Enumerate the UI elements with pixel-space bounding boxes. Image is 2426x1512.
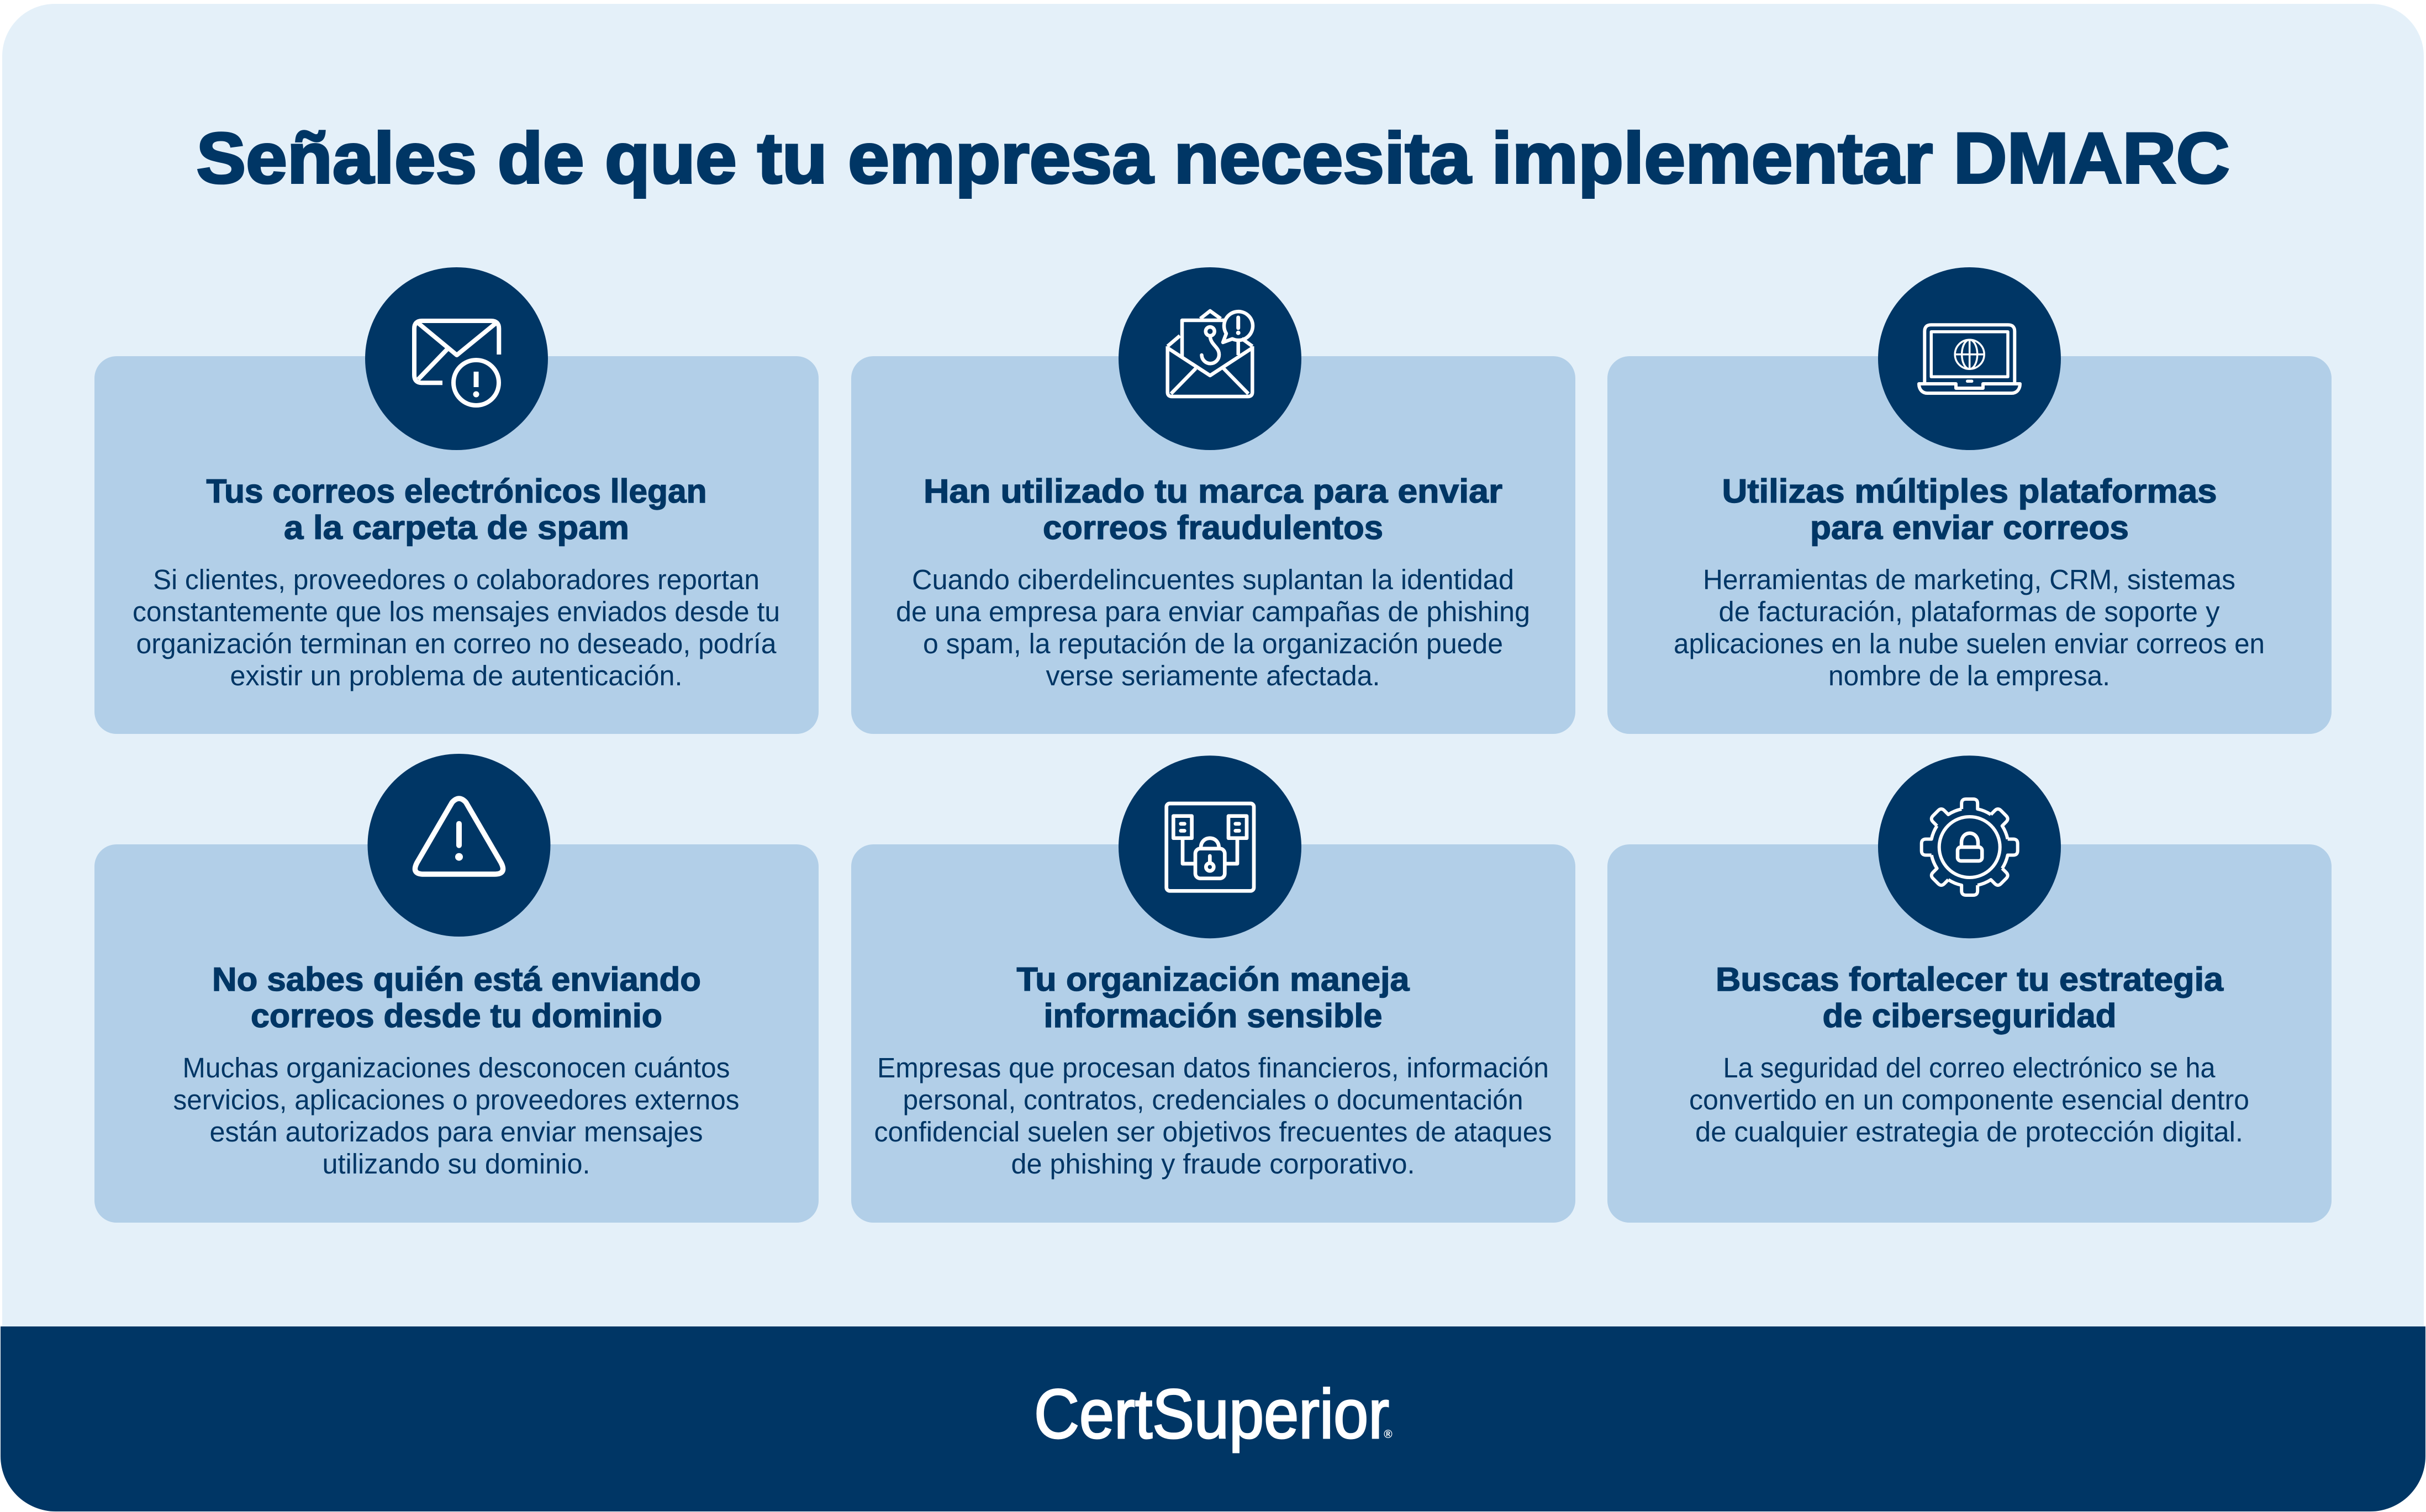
card 1 body text: existir un problema de autenticación. xyxy=(230,660,683,691)
panel: card 1 spam folder xyxy=(94,267,819,734)
icon: laptop with globe xyxy=(1878,267,2061,450)
card 2 body text: Cuando ciberdelincuentes suplantan la identidad xyxy=(912,564,1514,595)
card 6 heading: Buscas fortalecer tu estrategia xyxy=(1716,961,2224,998)
card 3 body text: nombre de la empresa. xyxy=(1828,660,2110,691)
card 4 body text: utilizando su dominio. xyxy=(323,1148,590,1180)
icon: network with padlock xyxy=(1119,755,1301,938)
card 6 body text: de cualquier estrategia de protección digital. xyxy=(1695,1116,2243,1148)
card 3 heading xyxy=(1722,473,2217,546)
card 2 body text xyxy=(896,564,1530,691)
card 1 body text: Si clientes, proveedores o colaboradores reportan xyxy=(153,564,760,595)
card 6 heading xyxy=(1716,961,2224,1034)
logo: CertSuperior: CertSuperior xyxy=(1034,1375,1389,1453)
card 5 background xyxy=(851,844,1575,1223)
card 2 background xyxy=(851,356,1575,734)
card 1 heading xyxy=(207,473,707,546)
card 2 heading: Han utilizado tu marca para enviar xyxy=(924,473,1502,510)
card 2 heading xyxy=(924,473,1502,546)
card 2 body text: o spam, la reputación de la organización puede xyxy=(923,628,1503,659)
card 6 body text: La seguridad del correo electrónico se ha xyxy=(1723,1052,2216,1083)
card 3 body text: Herramientas de marketing, CRM, sistemas xyxy=(1703,564,2235,595)
card 4 heading: correos desde tu dominio xyxy=(251,997,662,1034)
card 3 background xyxy=(1607,356,2332,734)
card 1 heading: a la carpeta de spam xyxy=(284,509,629,546)
card 3 body text: de facturación, plataformas de soporte y xyxy=(1719,596,2220,627)
panel: card 5 sensitive information xyxy=(851,755,1575,1223)
card 6 body text xyxy=(1689,1052,2249,1148)
card 5 body text: de phishing y fraude corporativo. xyxy=(1011,1148,1415,1180)
icon: envelope with warning xyxy=(365,267,548,450)
card 3 heading: para enviar correos xyxy=(1810,509,2129,546)
card 5 body text: Empresas que procesan datos financieros, información xyxy=(877,1052,1549,1083)
card 1 body text xyxy=(133,564,780,691)
card 5 body text: personal, contratos, credenciales o documentación xyxy=(903,1084,1523,1116)
card 6 body text: convertido en un componente esencial dentro xyxy=(1689,1084,2249,1116)
card 4 heading: No sabes quién está enviando xyxy=(212,961,701,998)
logo: CertSuperior: ® xyxy=(1384,1428,1393,1441)
card 1 body text: constantemente que los mensajes enviados desde tu xyxy=(133,596,780,627)
panel: card 3 multiple platforms xyxy=(1607,267,2332,734)
card 6 heading: de ciberseguridad xyxy=(1823,997,2117,1034)
footer band xyxy=(1,1326,2425,1511)
panel: card 6 cybersecurity strategy xyxy=(1607,755,2332,1223)
card 4 body text xyxy=(173,1052,739,1180)
card 3 body text: aplicaciones en la nube suelen enviar correos en xyxy=(1674,628,2265,659)
card 5 heading: información sensible xyxy=(1044,997,1382,1034)
card 2 body text: verse seriamente afectada. xyxy=(1046,660,1380,691)
icon: gear with padlock xyxy=(1878,755,2061,938)
card 5 heading xyxy=(1016,961,1410,1034)
icon: warning triangle xyxy=(368,754,550,937)
card 5 heading: Tu organización maneja xyxy=(1016,961,1410,998)
card 5 body text xyxy=(874,1052,1552,1180)
card 2 heading: correos fraudulentos xyxy=(1043,509,1383,546)
card 4 body text: servicios, aplicaciones o proveedores externos xyxy=(173,1084,739,1116)
card 5 body text: confidencial suelen ser objetivos frecuentes de ataques xyxy=(874,1116,1552,1148)
card 2 body text: de una empresa para enviar campañas de phishing xyxy=(896,596,1530,627)
title: Señales de que tu empresa necesita implementar DMARC xyxy=(197,118,2229,198)
panel: card 2 brand abuse xyxy=(851,267,1575,734)
card 4 body text: están autorizados para enviar mensajes xyxy=(210,1116,703,1148)
card 3 body text xyxy=(1674,564,2265,691)
card 4 body text: Muchas organizaciones desconocen cuántos xyxy=(182,1052,730,1083)
card 1 heading: Tus correos electrónicos llegan xyxy=(207,473,707,510)
card 6 background xyxy=(1607,844,2332,1223)
card 3 heading: Utilizas múltiples plataformas xyxy=(1722,473,2217,510)
card 4 background xyxy=(94,844,819,1223)
card 1 background xyxy=(94,356,819,734)
panel: card 4 unknown senders xyxy=(94,754,819,1223)
card 1 body text: organización terminan en correo no deseado, podría xyxy=(136,628,777,659)
card 4 heading xyxy=(212,961,701,1034)
icon: envelope with hook and alert bubble xyxy=(1119,267,1301,450)
